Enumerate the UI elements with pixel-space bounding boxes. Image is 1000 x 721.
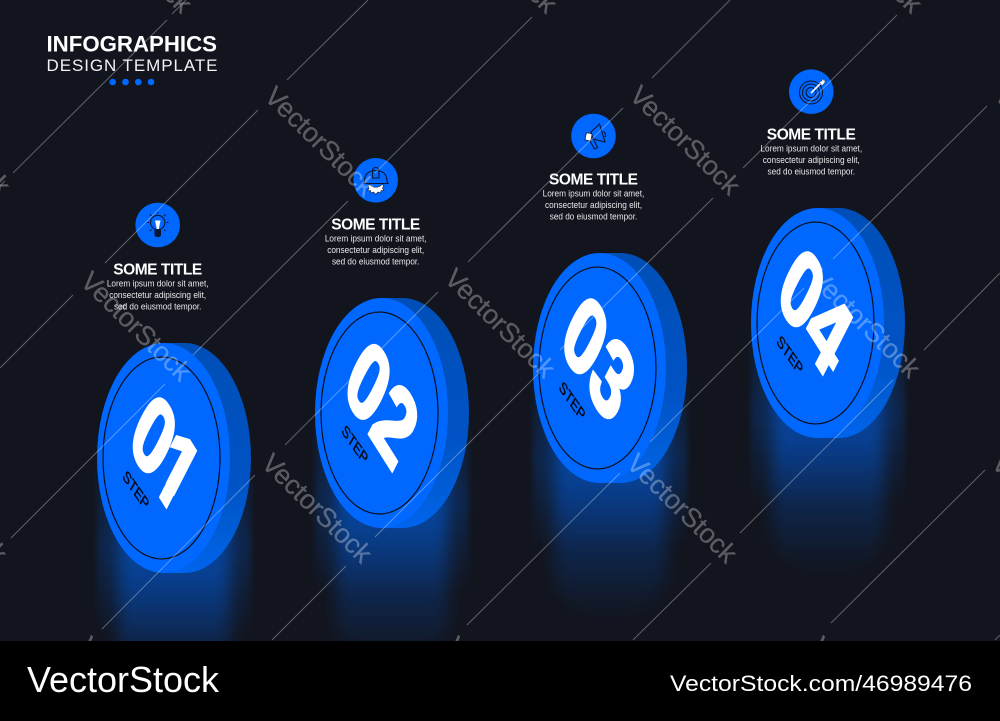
- watermark: VectorStock: [621, 448, 743, 569]
- coin: step 01: [97, 343, 251, 573]
- coin: step 02: 02: [331, 316, 431, 492]
- coin: step 02: STEP: [339, 422, 370, 468]
- glow: step 1: [97, 458, 251, 710]
- step 1 icon: light bulb: [135, 203, 180, 247]
- step 2 text: consectetur adipiscing elit,: [327, 245, 424, 255]
- step 1 text: sed do eiusmod tempor.: [114, 302, 201, 312]
- coin: step 03: STEP: [556, 379, 587, 425]
- coin: step 01: STEP: [120, 468, 151, 514]
- glow: step 2: [315, 413, 469, 665]
- title: INFOGRAPHICS: [46, 32, 217, 56]
- coin: step 03: [533, 253, 687, 483]
- step 4 text: sed do eiusmod tempor.: [768, 166, 855, 176]
- watermark: VectorStock: [75, 266, 197, 387]
- step 1 text: [107, 262, 209, 312]
- coin: step 01: 0: [117, 370, 190, 503]
- step 3 text: [543, 172, 644, 222]
- step 1 text: Lorem ipsum dolor sit amet,: [107, 278, 209, 288]
- step 4 text: Lorem ipsum dolor sit amet,: [760, 144, 862, 154]
- step 1 text: SOME TITLE: [113, 262, 202, 278]
- footer bar: [0, 641, 1000, 721]
- coin: step 01: 1: [140, 406, 213, 539]
- step 3 text: Lorem ipsum dolor sit amet,: [543, 188, 644, 198]
- glow: step 3: [533, 368, 687, 620]
- footer bar: VectorStock: [27, 659, 220, 700]
- coin: step 04: STEP: [774, 333, 805, 379]
- footer bar: VectorStock.com/46989476: [670, 671, 972, 696]
- step 2 text: SOME TITLE: [331, 216, 420, 234]
- watermark: VectorStock: [259, 81, 381, 202]
- coin: step 04: [751, 208, 905, 438]
- step 2 text: [325, 216, 427, 266]
- step 4 text: consectetur adipiscing elit,: [763, 155, 860, 165]
- coin: step 02: [315, 298, 469, 528]
- step 4 text: [760, 126, 862, 176]
- watermark: VectorStock: [256, 448, 378, 569]
- step 4 text: SOME TITLE: [767, 126, 856, 144]
- glow: step 4: [751, 323, 905, 575]
- watermark: VectorStock: [439, 263, 561, 384]
- step 3 text: sed do eiusmod tempor.: [550, 212, 637, 222]
- title: [46, 32, 218, 75]
- step 1 text: consectetur adipiscing elit,: [109, 290, 206, 300]
- watermark: VectorStock: [624, 80, 746, 201]
- step 4 icon: target with dart: [789, 69, 834, 114]
- step 3 icon: megaphone: [571, 114, 616, 158]
- step 3 text: consectetur adipiscing elit,: [545, 200, 642, 210]
- watermark: VectorStock: [804, 263, 926, 384]
- header dots: [109, 79, 154, 85]
- coin: step 04: 04: [765, 224, 865, 399]
- step 3 text: SOME TITLE: [549, 172, 638, 188]
- step 2 icon: helmet and gear: [353, 158, 398, 203]
- coin: step 03: 03: [548, 271, 648, 446]
- step 2 text: sed do eiusmod tempor.: [332, 256, 419, 266]
- title: DESIGN TEMPLATE: [46, 56, 218, 75]
- step 2 text: Lorem ipsum dolor sit amet,: [325, 234, 427, 244]
